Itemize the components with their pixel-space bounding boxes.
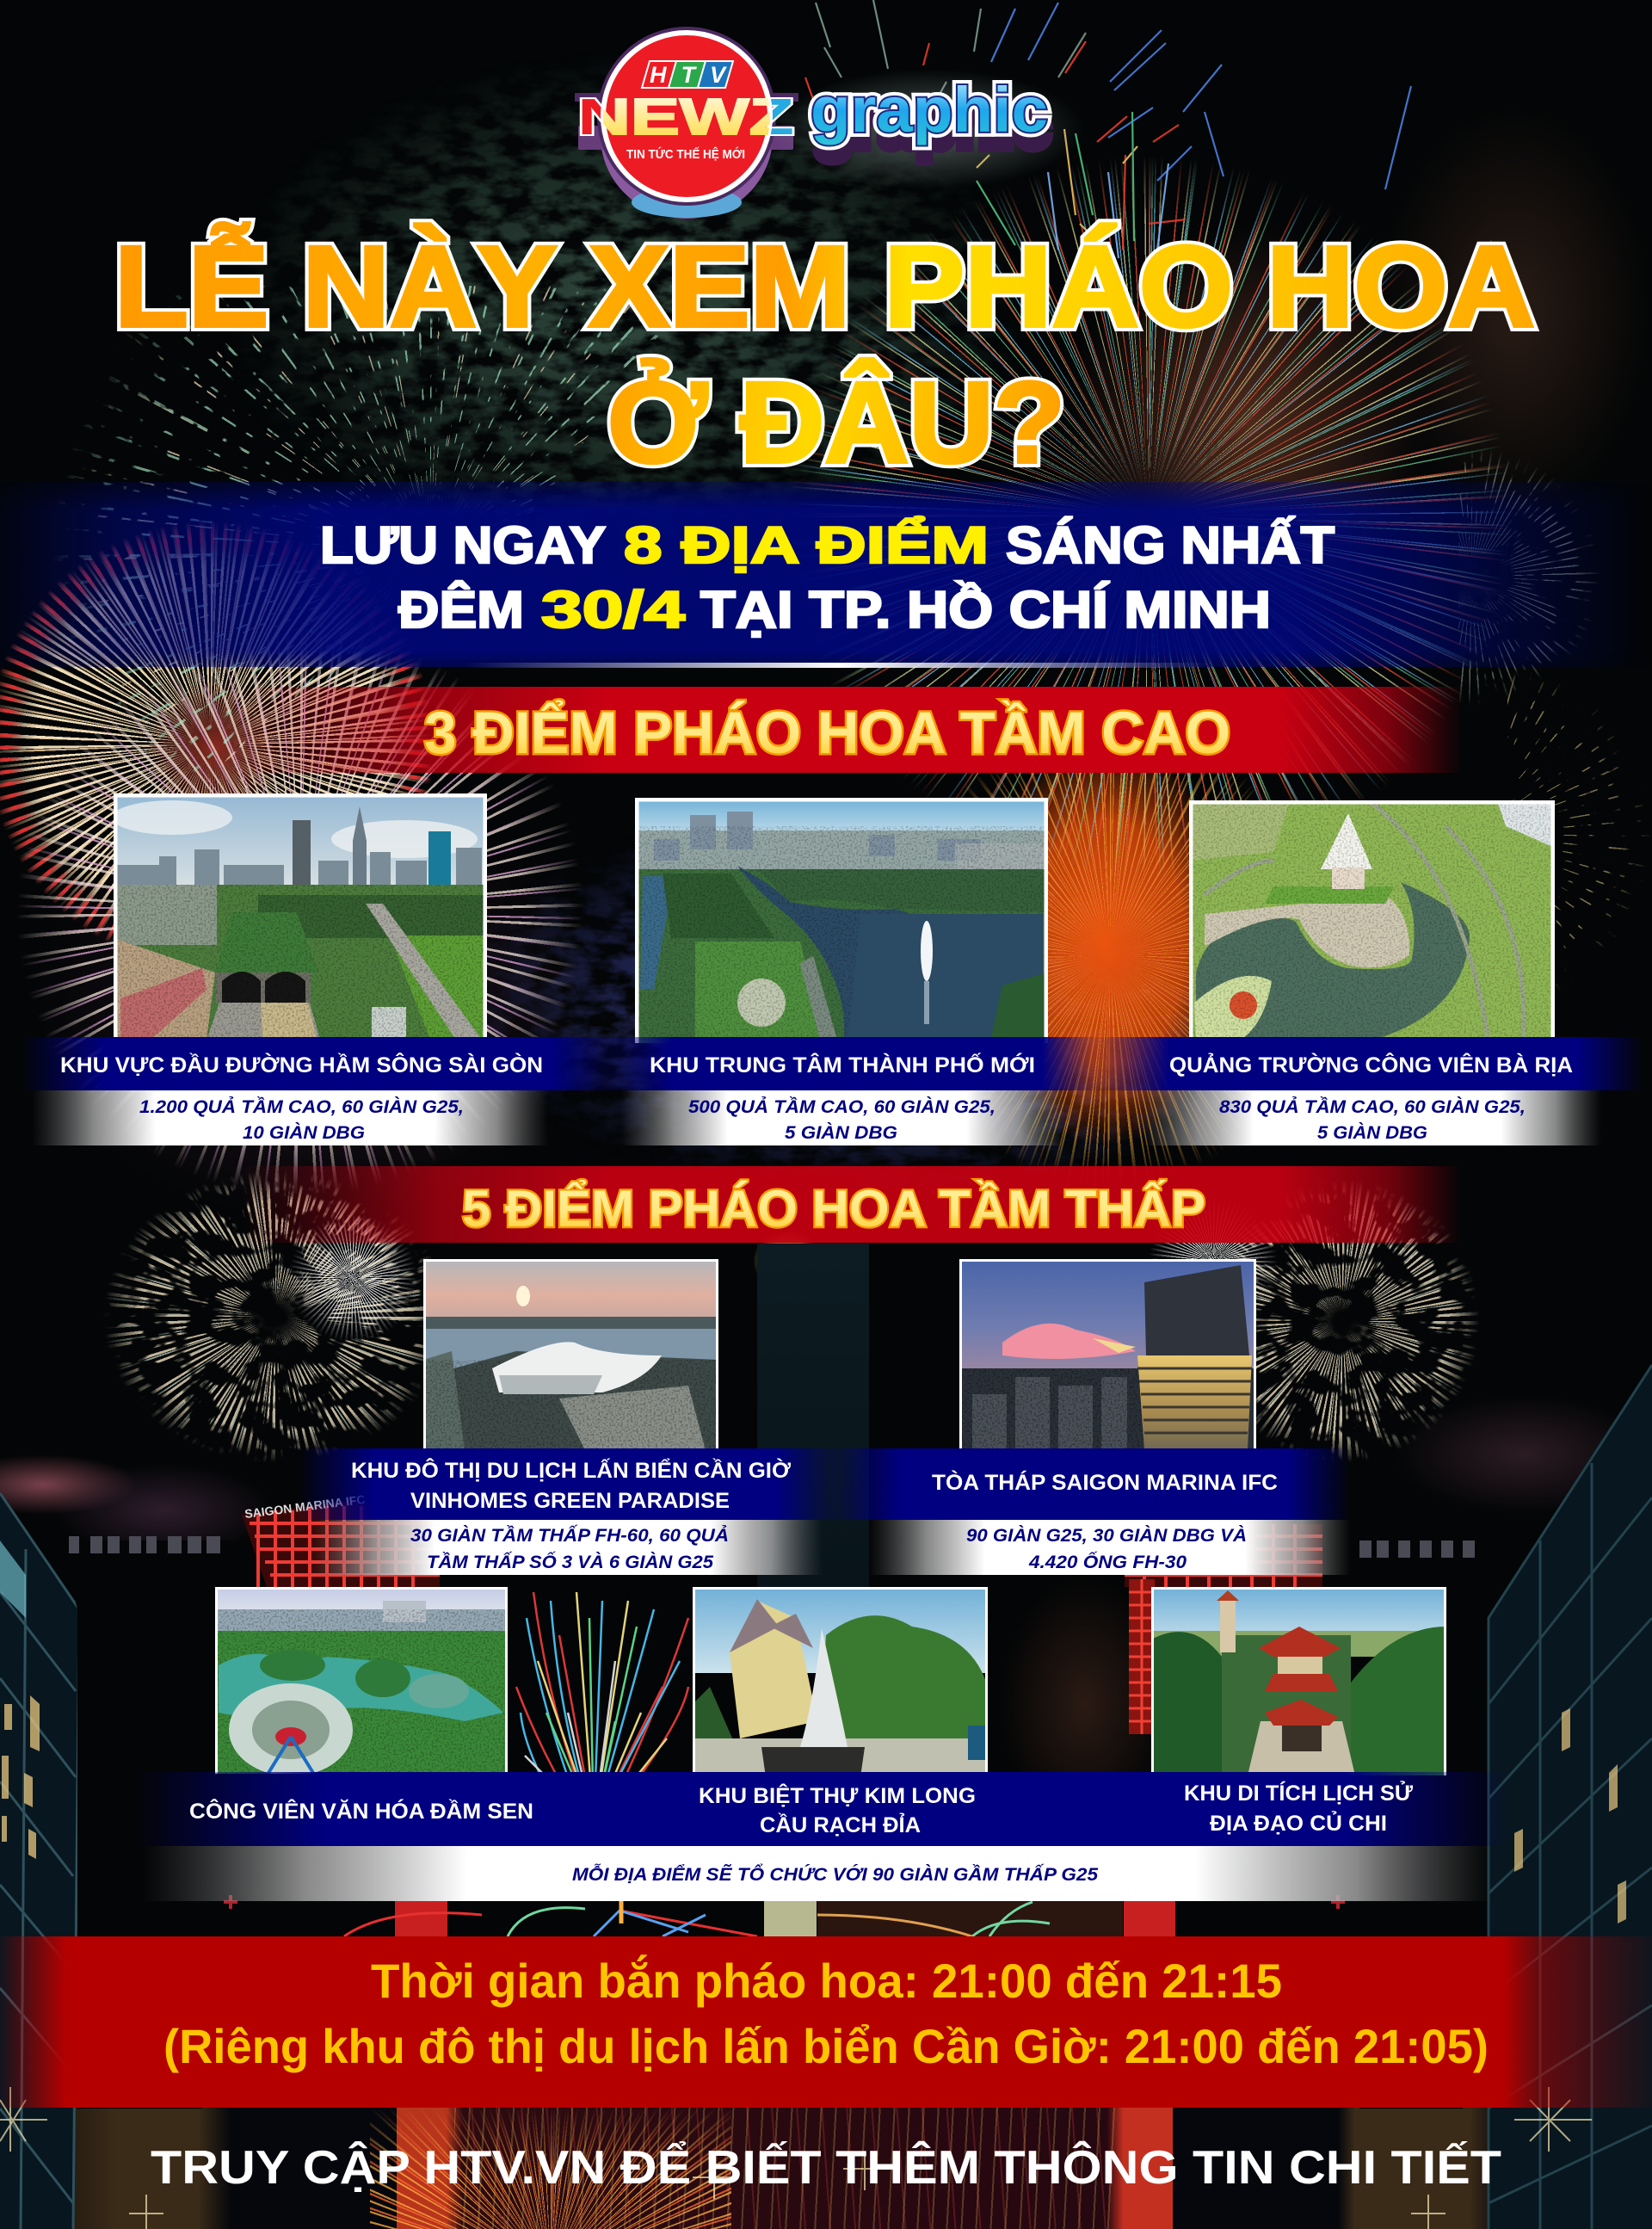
subtitle line 1: SÁNG NHẤT	[1006, 516, 1335, 574]
building: red lit Saigon Marina towers: SAIGON MARINA IFC	[243, 1492, 366, 1521]
subtitle blue band	[0, 482, 1652, 667]
logo: graphic wordmark	[774, 69, 1084, 189]
fireworks strip above the time banner	[344, 1898, 1050, 1936]
photo: Can Gio Vinhomes Green Paradise	[423, 1259, 718, 1453]
fireworks streaks: centre low	[516, 1592, 688, 1825]
logo: tagline: TIN TỨC THẾ HỆ MỚI	[626, 146, 745, 162]
photo: new city centre lake	[635, 798, 1048, 1047]
divider glow line	[465, 663, 1211, 668]
title line 2: Ở ĐÂU?	[607, 358, 1065, 487]
footer call to action: TRUY CẬP HTV.VN ĐỂ BIẾT THÊM THÔNG TIN CHI TIẾT	[151, 2140, 1501, 2194]
label: Dam Sen, Kim Long, Cu Chi: KHU BIỆT THỰ KIM LONG	[699, 1782, 976, 1808]
label: Can Gio and Saigon Marina	[299, 1448, 1351, 1520]
label: high points: QUẢNG TRƯỜNG CÔNG VIÊN BÀ RỊA	[1169, 1052, 1573, 1077]
subtitle line 2	[398, 581, 1271, 639]
banner: firing time	[0, 1936, 1652, 2108]
building: red lit Saigon Marina towers	[242, 1492, 1322, 1936]
photo: Kim Long villas	[693, 1587, 988, 1777]
building: left tower	[0, 1493, 79, 2229]
building: right tower	[1489, 1365, 1652, 2229]
label: Dam Sen, Kim Long, Cu Chi: CẦU RẠCH ĐỈA	[760, 1812, 921, 1837]
section heading: 3 high-altitude points: 3 ĐIỂM PHÁO HOA TẦM CAO	[424, 700, 1230, 766]
section heading: 5 low-altitude points: 5 ĐIỂM PHÁO HOA TẦM THẤP	[462, 1180, 1205, 1238]
photo: Ba Ria square park	[1189, 800, 1555, 1050]
logo: HTV badge: HTV	[650, 62, 727, 88]
logo: HTV NEWZ: NEWZ	[577, 89, 794, 145]
sparkles on buildings	[0, 1895, 1592, 2229]
detail: high points quantities: 500 QUẢ TẦM CAO, 60 GIÀN G25,	[688, 1097, 996, 1117]
subtitle line 1: 8 ĐỊA ĐIỂM	[624, 516, 989, 574]
detail: high points quantities: 830 QUẢ TẦM CAO, 60 GIÀN G25,	[1219, 1097, 1526, 1117]
label: high points: KHU VỰC ĐẦU ĐƯỜNG HẦM SÔNG SÀI GÒN	[60, 1052, 543, 1077]
title line 1: LỄ NÀY XEM PHÁO HOA	[114, 223, 1535, 351]
title line 1: LỄ NÀY XEM PHÁO HOA	[114, 223, 1535, 351]
title line 2: Ở ĐÂU?	[607, 358, 1065, 487]
logo: HTV NEWZ	[575, 27, 798, 219]
detail: Can Gio and Saigon Marina quantities: 90 GIÀN G25, 30 GIÀN DBG VÀ	[966, 1526, 1247, 1546]
label: high points: KHU TRUNG TÂM THÀNH PHỐ MỚI	[650, 1052, 1035, 1077]
detail: Can Gio and Saigon Marina quantities: TẦM THẤP SỐ 3 VÀ 6 GIÀN G25	[427, 1552, 713, 1572]
building: low rooflines	[60, 1536, 1497, 2109]
detail: high points quantities: 10 GIÀN DBG	[243, 1123, 365, 1143]
photo: Sai Gon river tunnel	[112, 793, 487, 1043]
label: Can Gio and Saigon Marina: VINHOMES GREEN PARADISE	[410, 1489, 730, 1513]
detail: Can Gio and Saigon Marina quantities: 4.420 ỐNG FH-30	[1028, 1552, 1187, 1572]
fireworks streaks: top right	[805, 0, 1411, 258]
section heading: 3 high-altitude points	[241, 687, 1463, 773]
photo: Saigon Marina IFC tower	[959, 1259, 1256, 1453]
subtitle line 1: LƯU NGAY	[320, 516, 606, 574]
detail: Can Gio and Saigon Marina quantities	[312, 1520, 1351, 1575]
detail: high points quantities: 5 GIÀN DBG	[785, 1123, 897, 1143]
detail: high points quantities: 1.200 QUẢ TẦM CAO, 60 GIÀN G25,	[139, 1097, 464, 1117]
label: Dam Sen, Kim Long, Cu Chi: KHU DI TÍCH LỊCH SỬ	[1184, 1780, 1413, 1806]
logo: graphic wordmark: graphic	[813, 90, 1051, 162]
label: high points	[21, 1037, 1643, 1090]
logo: graphic wordmark: graphic	[811, 74, 1048, 145]
detail: five low points quantity	[143, 1846, 1492, 1901]
label: Dam Sen, Kim Long, Cu Chi: ĐỊA ĐẠO CỦ CHI	[1210, 1810, 1387, 1836]
detail: high points quantities: 5 GIÀN DBG	[1317, 1123, 1427, 1143]
label: Can Gio and Saigon Marina: TÒA THÁP SAIGON MARINA IFC	[932, 1469, 1278, 1495]
section heading: 5 low-altitude points	[241, 1166, 1463, 1243]
label: Dam Sen, Kim Long, Cu Chi: CÔNG VIÊN VĂN HÓA ĐẦM SEN	[189, 1798, 533, 1824]
logo: graphic wordmark: graphic	[811, 74, 1048, 145]
photo: Cu Chi tunnels historic site	[1151, 1587, 1446, 1778]
banner: firing time: (Riêng khu đô thị du lịch lấn biển Cần Giờ: 21:00 đến 21:05)	[163, 2019, 1489, 2073]
detail: Can Gio and Saigon Marina quantities: 30 GIÀN TẦM THẤP FH-60, 60 QUẢ	[410, 1525, 729, 1546]
detail: five low points quantity: MỖI ĐỊA ĐIỂM SẼ TỔ CHỨC VỚI 90 GIÀN GẦM THẤP G25	[572, 1864, 1098, 1885]
subtitle line 2: 30/4	[541, 581, 686, 639]
label: Dam Sen, Kim Long, Cu Chi	[133, 1772, 1511, 1846]
detail: high points quantities	[32, 1090, 1601, 1145]
banner: firing time: Thời gian bắn pháo hoa: 21:00 đến 21:15	[371, 1954, 1282, 2008]
label: Can Gio and Saigon Marina: KHU ĐÔ THỊ DU LỊCH LẤN BIỂN CẦN GIỜ	[351, 1457, 792, 1483]
logo: HTV NEWZ: NEWZ	[577, 89, 794, 145]
photo: Dam Sen park	[215, 1587, 508, 1777]
subtitle line 2: ĐÊM	[398, 581, 524, 639]
subtitle line 2: TẠI TP. HỒ CHÍ MINH	[700, 581, 1271, 639]
subtitle line 1	[320, 516, 1335, 574]
